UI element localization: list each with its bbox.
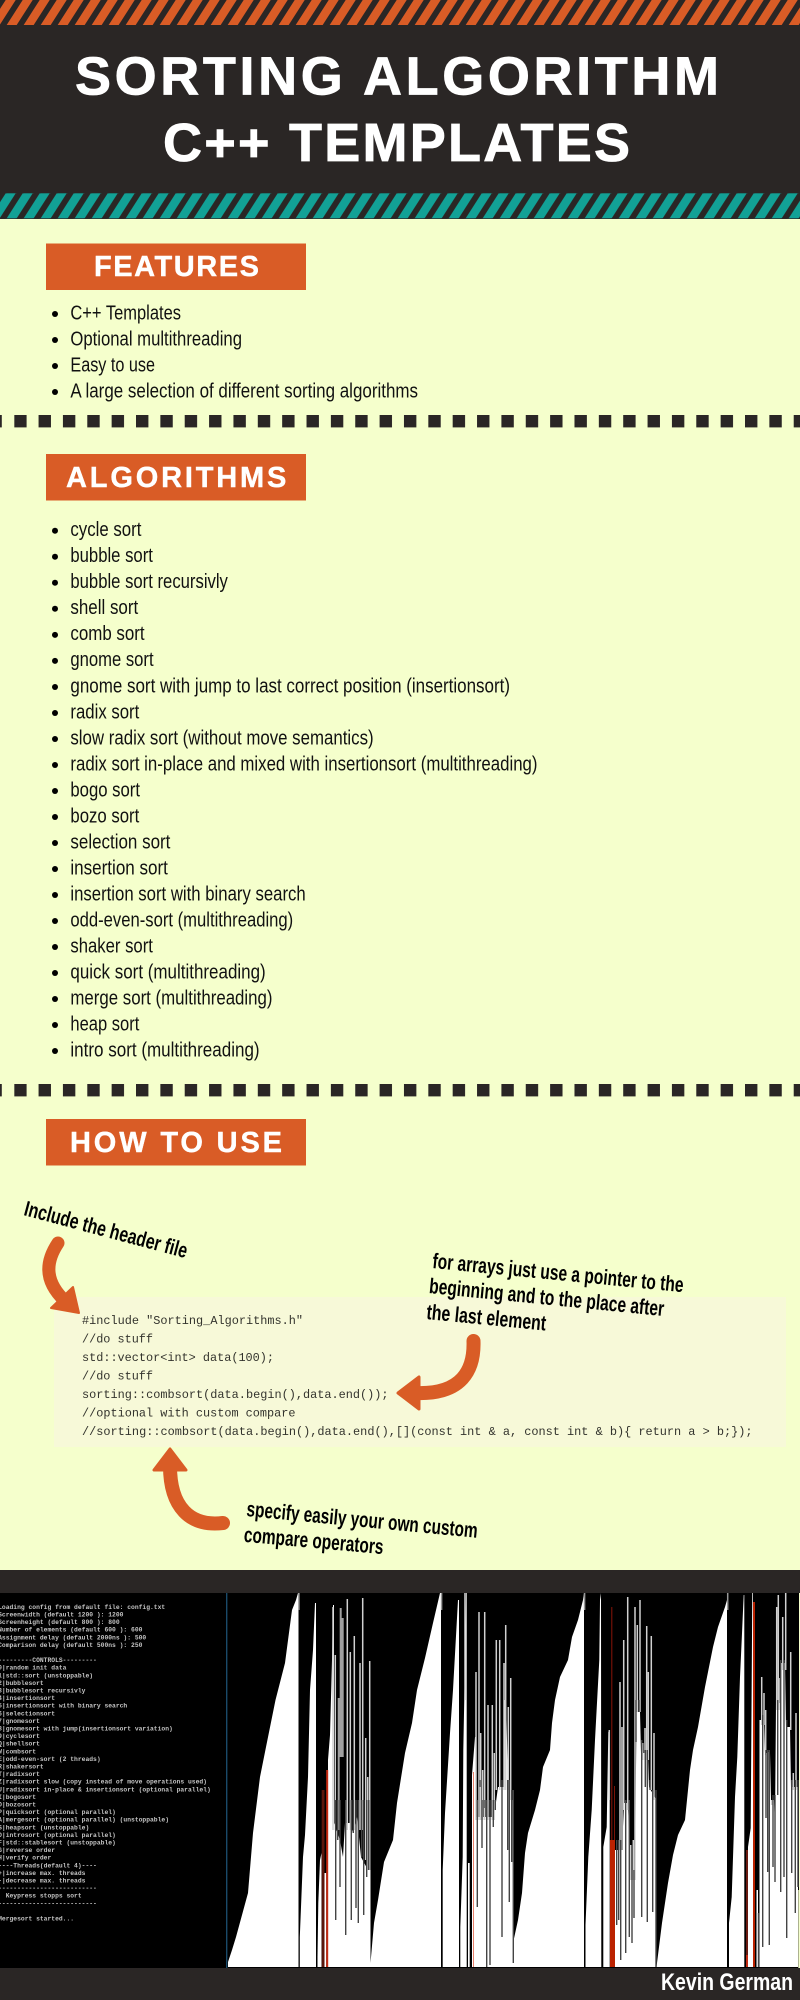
- feature list: Optional multithreading: [70, 328, 242, 350]
- algorithm list: gnome sort with jump to last correct position (insertionsort): [70, 675, 510, 697]
- heading: features: FEATURES: [94, 251, 259, 283]
- panel: screenshot footer: [0, 1570, 800, 2000]
- terminal text: 1|std::sort (unstoppable): [0, 1672, 93, 1679]
- panel: how to use: [22, 1119, 786, 1559]
- annotation: for arrays: for arrays just use a pointer to the: [432, 1249, 685, 1297]
- algorithm list: cycle sort: [70, 519, 142, 541]
- teal striped band: [0, 193, 800, 218]
- terminal text: --------------------------: [0, 1900, 97, 1907]
- code block: sorting::combsort(data.begin(),data.end());: [82, 1388, 388, 1402]
- title: SORTING ALGORITHM: [75, 46, 719, 106]
- terminal text: D|introsort (optional parallel): [0, 1832, 116, 1839]
- annotation: include the header file: Include the header file: [22, 1197, 190, 1263]
- red comparison bars: [322, 1602, 755, 1967]
- arrow: to custom compare: [154, 1449, 223, 1524]
- terminal text: -|decrease max. threads: [0, 1878, 86, 1884]
- sort visualisation chart: [228, 1593, 798, 1967]
- code block: //do stuff: [82, 1332, 153, 1346]
- algorithm list: intro sort (multithreading): [70, 1039, 260, 1061]
- annotation: for arrays: the last element: [426, 1300, 547, 1335]
- title: C++ TEMPLATES: [163, 113, 630, 173]
- terminal text: Screenheight (default 800 ): 800: [0, 1619, 120, 1626]
- code block: std::vector<int> data(100);: [82, 1351, 274, 1365]
- heading: algorithms: ALGORITHMS: [66, 462, 286, 494]
- algorithm list: insertion sort: [70, 857, 168, 879]
- panel: features: [46, 244, 418, 402]
- algorithm list: shaker sort: [70, 935, 153, 957]
- terminal text: 8|gnomesort with jump(insertionsort variation): [0, 1726, 173, 1732]
- arrow: to include line: [49, 1243, 79, 1313]
- algorithm list: radix sort: [70, 701, 140, 723]
- screenshot: black window: [0, 1593, 800, 1968]
- annotation: custom compare: [243, 1497, 479, 1559]
- terminal text: Number of elements (default 600 ): 600: [0, 1627, 143, 1634]
- terminal text: ---------CONTROLS---------: [0, 1657, 97, 1664]
- heading: how to use: HOW TO USE: [70, 1127, 282, 1159]
- algorithm list: slow radix sort (without move semantics): [70, 727, 374, 749]
- terminal text: Keypress stopps sort: [0, 1893, 82, 1900]
- heading: features: [46, 244, 306, 290]
- terminal text: 5|insertionsort with binary search: [0, 1703, 127, 1710]
- terminal text: S|heapsort (unstoppable): [0, 1824, 89, 1831]
- algorithm list: selection sort: [70, 831, 171, 853]
- grey rising spikes: [299, 1593, 796, 1880]
- terminal text: ----Threads(default 4)----: [0, 1862, 97, 1869]
- algorithm list: quick sort (multithreading): [70, 961, 266, 983]
- orange striped band: [0, 0, 800, 25]
- algorithm list: radix sort in-place and mixed with insertionsort (multithreading): [70, 753, 538, 775]
- algorithm list: shell sort: [70, 597, 139, 619]
- dark falling spikes: [336, 1660, 798, 1967]
- terminal text: +|increase max. threads: [0, 1870, 86, 1877]
- algorithm list: odd-even-sort (multithreading): [70, 909, 293, 931]
- feature list: Easy to use: [70, 354, 155, 376]
- algorithm list: bubble sort: [70, 545, 153, 567]
- terminal text: Loading config from default file: config.txt: [0, 1604, 165, 1611]
- terminal text: Comparison delay (default 500ns ): 250: [0, 1642, 143, 1649]
- code block: #include "Sorting_Algorithms.h": [82, 1314, 303, 1328]
- heading: algorithms: [46, 454, 306, 500]
- terminal text: Assignment delay (default 2000ns ): 500: [0, 1634, 146, 1641]
- algorithm list: bogo sort: [70, 779, 140, 801]
- title: [75, 46, 719, 173]
- code block: //do stuff: [82, 1370, 153, 1384]
- terminal text: [0, 1604, 211, 1922]
- panel: algorithms: [46, 454, 538, 1061]
- algorithm list: bubble sort recursivly: [70, 571, 228, 593]
- terminal text: A|mergesort (optional parallel) (unstoppable): [0, 1817, 169, 1824]
- header banner: [0, 0, 800, 219]
- algorithm list: gnome sort: [70, 649, 154, 671]
- code block: //optional with custom compare: [82, 1406, 296, 1420]
- annotation: custom compare: specify easily your own custom: [246, 1497, 479, 1543]
- arrow: to combsort call: [398, 1341, 474, 1409]
- code block: //sorting::combsort(data.begin(),data.end(),[](const int & a, const int & b){ return a > b;});: [82, 1425, 752, 1439]
- algorithm list: comb sort: [70, 623, 145, 645]
- algorithm list: merge sort (multithreading): [70, 987, 273, 1009]
- algorithm list: heap sort: [70, 1013, 140, 1035]
- terminal text: --------------------------: [0, 1885, 97, 1892]
- algorithm list: bozo sort: [70, 805, 140, 827]
- terminal text: E|odd-even-sort (2 threads): [0, 1756, 101, 1763]
- feature list: A large selection of different sorting algorithms: [70, 380, 418, 402]
- terminal text: Screenwidth (default 1200 ): 1200: [0, 1612, 124, 1618]
- window divider: [226, 1593, 227, 1968]
- terminal text: F|std::stablesort (unstoppable): [0, 1840, 116, 1846]
- annotation: for arrays: [426, 1249, 685, 1335]
- heading: how to use: [46, 1119, 306, 1166]
- algorithm list: [52, 519, 538, 1061]
- code block: [54, 1297, 786, 1447]
- terminal text: U|radixsort in-place & insertionsort (optional parallel): [0, 1786, 211, 1793]
- terminal text: Z|radixsort slow (copy instead of move operations used): [0, 1779, 207, 1786]
- feature list: [52, 302, 418, 402]
- annotation: custom compare: compare operators: [243, 1523, 385, 1559]
- terminal text: P|quicksort (optional parallel): [0, 1809, 116, 1816]
- terminal text: Mergesort started...: [0, 1916, 74, 1922]
- right edge strip: [798, 1593, 800, 1968]
- terminal text: 0|random init data: [0, 1665, 67, 1672]
- annotation: for arrays: beginning and to the place after: [428, 1274, 666, 1321]
- feature list: C++ Templates: [70, 302, 181, 324]
- terminal text: 3|bubblesort recursivly: [0, 1688, 86, 1694]
- algorithm list: insertion sort with binary search: [70, 883, 306, 905]
